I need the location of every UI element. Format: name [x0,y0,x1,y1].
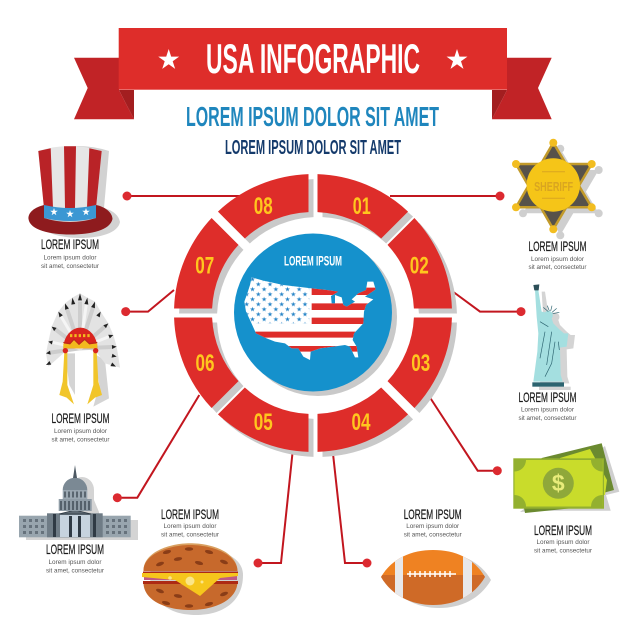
segment 01 [318,174,408,238]
segment numbers [195,193,430,436]
label: capitol [46,541,105,574]
segment 02 [369,218,478,328]
connector 08 [122,192,240,200]
label: hat [41,236,100,270]
star shadow [519,145,603,239]
label: headdress [52,410,110,444]
laces [407,571,456,577]
label: capitol: LOREM IPSUM [46,541,104,557]
label: burger: sit amet, consectetur [161,532,220,538]
segment 05 [218,388,308,452]
yellow tassels [59,352,102,404]
center blue circle with USA flag map [234,234,397,396]
robe folds [540,322,559,377]
icon: dollar bills [513,443,619,513]
segment numbers: 04 [352,409,371,436]
icon: capitol building [19,465,138,540]
segment numbers: 01 [353,193,371,220]
segmented ring shadow [153,153,483,483]
feather tips [46,293,117,367]
label: liberty: LOREM IPSUM [518,389,576,405]
label: headdress: sit amet, consectetur [52,436,110,444]
label: hat: LOREM IPSUM [41,236,99,252]
title text: USA INFOGRAPHIC [206,35,420,82]
label: burger: Lorem ipsum dolor [164,523,217,530]
label: football: sit amet, consectetur [404,532,462,538]
label: burger [161,506,220,538]
subtitle navy: LOREM IPSUM DOLOR SIT AMET [225,137,401,159]
pedestal [532,382,564,387]
label: hat: Lorem ipsum dolor [44,254,97,262]
torch [533,284,539,290]
connector 07 [121,290,174,316]
label: liberty: Lorem ipsum dolor [521,406,575,414]
label: liberty: sit amet, consectetur [518,415,577,422]
segment numbers: 06 [196,350,214,377]
center heading: LOREM IPSUM [284,253,342,269]
segment numbers: 02 [410,252,429,280]
label: money: Lorem ipsum dolor [536,539,590,546]
segment 07 [174,218,238,308]
label: money: sit amet, consectetur [534,548,593,554]
segment 03 [388,318,452,408]
subtitle blue: LOREM IPSUM DOLOR SIT AMET [186,101,439,132]
flag map of USA [244,278,376,360]
segment numbers: 07 [195,252,214,280]
icon: burger [142,543,243,615]
label: sheriff: sit amet, consectetur [528,264,587,271]
connector 02 [451,290,526,316]
label: football: LOREM IPSUM [404,506,462,522]
statue body [533,290,568,382]
title ribbon banner [74,28,552,119]
icon: uncle sam hat [28,146,120,238]
icon: native headdress [46,293,120,407]
label: capitol: Lorem ipsum dolor [48,559,102,566]
segment numbers: 03 [411,350,430,377]
icon: american football [381,550,491,608]
label: football: Lorem ipsum dolor [406,523,460,530]
sesame seeds [155,547,229,608]
icon: sheriff star [512,139,603,239]
feather fan [46,293,120,368]
red cap [63,328,97,348]
connector lines and dots [113,192,526,568]
headdress tails [65,353,109,407]
segment numbers: 08 [254,193,273,220]
label: liberty [518,389,577,422]
segment numbers: 05 [254,409,273,436]
icon: sheriff star: SHERIFF [534,179,573,194]
connector 06 [113,395,199,502]
crown rays [543,306,559,314]
label: football [404,506,462,538]
label: money [534,522,593,554]
label: hat: sit amet, consectetur [41,263,100,270]
label: sheriff: Lorem ipsum dolor [531,256,585,263]
connector 04 [333,451,372,568]
segment 06 [148,298,257,408]
connector 01 [390,192,504,200]
connector 03 [428,394,502,475]
icon: statue of liberty [532,284,575,390]
label: sheriff [528,238,587,271]
connector 05 [254,451,293,568]
label: burger: LOREM IPSUM [161,506,219,522]
ribbon left tail [74,58,134,119]
ribbon right tail [492,58,552,119]
star right [447,49,467,69]
ribbon main band [119,28,507,90]
segment 08 [218,148,328,257]
segmented ring [148,148,478,478]
label: headdress: LOREM IPSUM [52,410,110,426]
icon: dollar bills: $ [552,470,565,496]
statue shadow [540,292,575,383]
star left [158,49,179,69]
label: capitol: sit amet, consectetur [46,568,105,574]
segment 04 [298,369,408,478]
label: headdress: Lorem ipsum dolor [54,428,108,435]
label: sheriff: LOREM IPSUM [528,238,586,254]
